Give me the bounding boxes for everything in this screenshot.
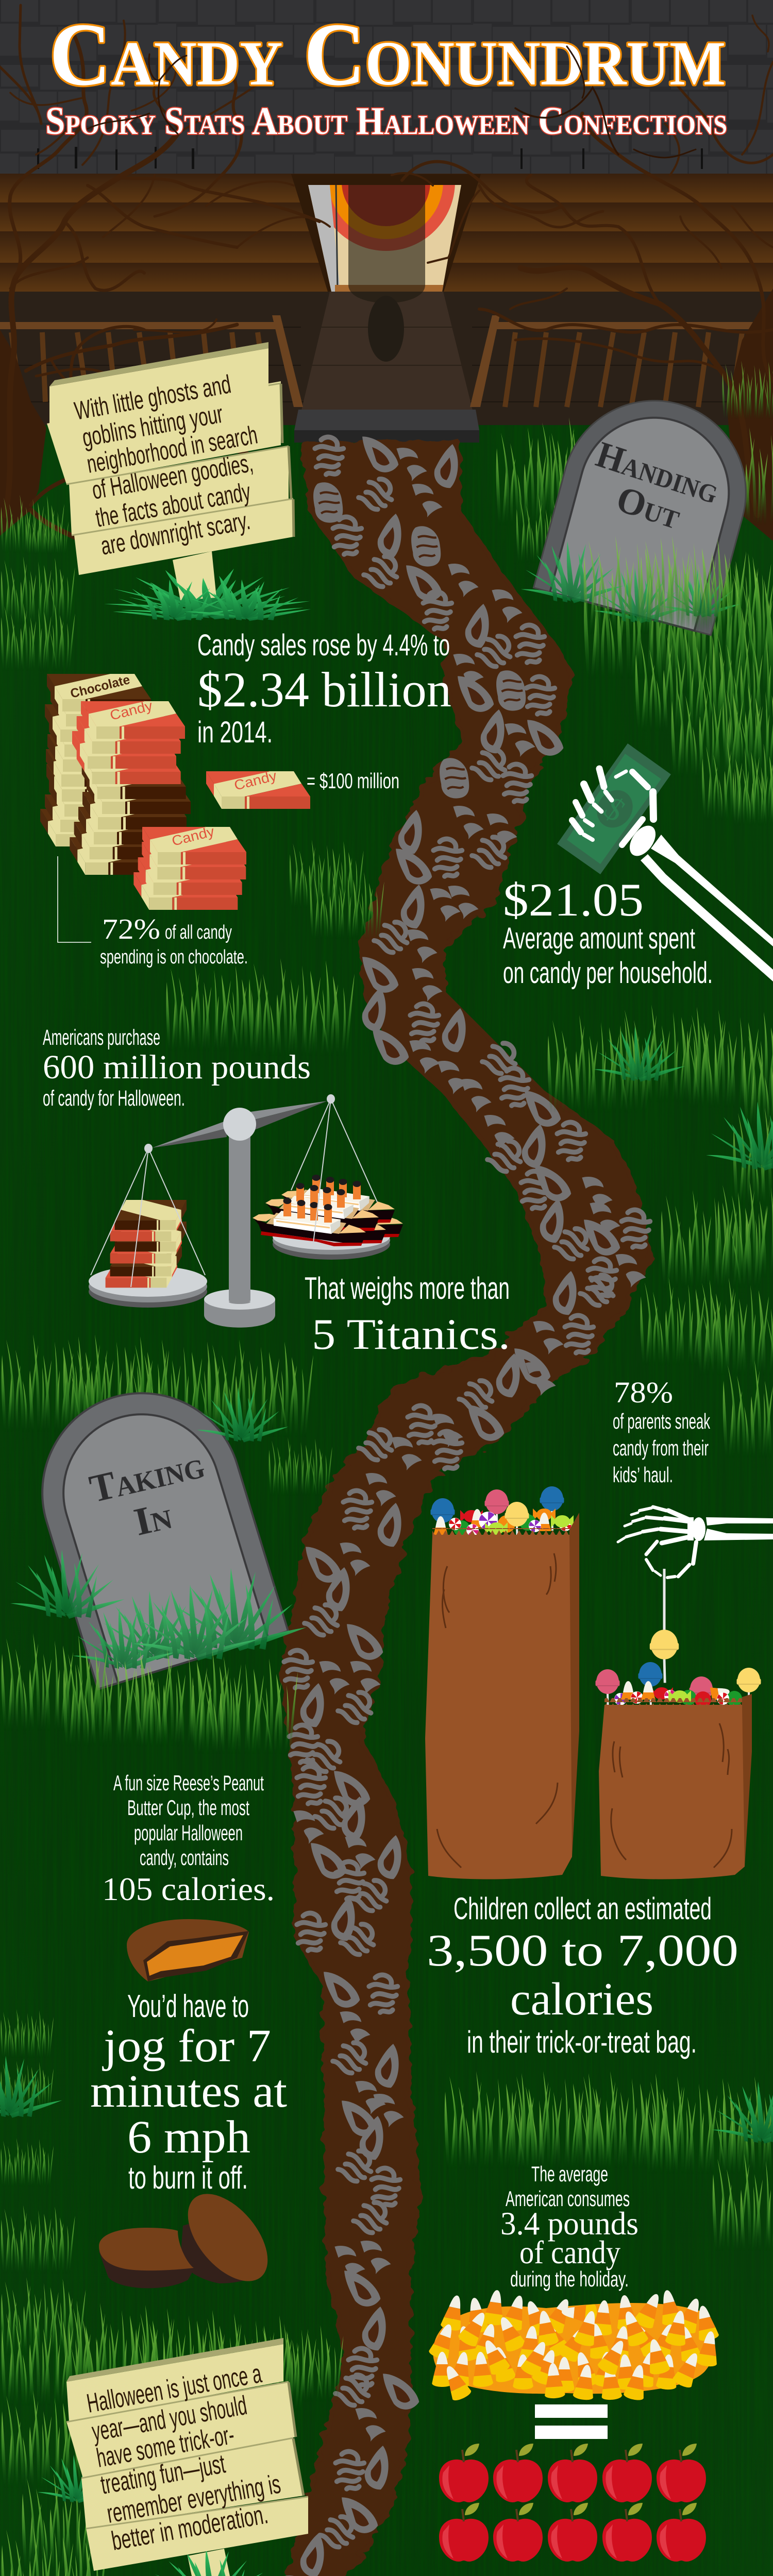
callout: 72% chocolate: of all candy [165, 922, 232, 943]
sign text: better in moderation. [109, 2499, 270, 2556]
text block: Reese's 105 calories: 105 calories. [102, 1871, 275, 1907]
text block: candy sales [197, 629, 451, 749]
front stack [133, 823, 246, 910]
porch floor [0, 292, 773, 425]
text block: $21.05 per household: $21.05 [503, 874, 644, 926]
icon: pile of candy corn [428, 2289, 721, 2402]
sign text: Halloween is just once a [85, 2359, 264, 2419]
left pan with candy [89, 1200, 207, 1308]
text block: 600 million pounds: of candy for Halloween. [43, 1086, 185, 1111]
right fence [470, 315, 773, 407]
text block: Children collect calories: calories [510, 1974, 653, 2025]
callout: 72% chocolate: 72% [102, 913, 160, 945]
icon: skeleton hand holding dollar [557, 743, 773, 981]
dirt path [266, 443, 651, 2576]
dollar bill [557, 743, 671, 874]
callout: 72% chocolate [58, 856, 248, 968]
text block: candy sales: Candy sales rose by 4.4% to [197, 629, 450, 662]
chocolate stack: Chocolate [69, 672, 131, 701]
text block: Reese's 105 calories: popular Halloween [134, 1821, 243, 1845]
text block: Reese's 105 calories: A fun size Reese’s Peanut [113, 1771, 264, 1795]
sign text: neighborhood in search [85, 420, 260, 479]
stone text: Handing Out: Out [612, 478, 685, 537]
bag contents [431, 1486, 574, 1546]
stone text: Taking In: In [130, 1494, 176, 1544]
text block: 3.4 pounds: The average [531, 2162, 608, 2186]
mixed stack [70, 698, 191, 875]
icon: short treat bag [596, 1662, 761, 1879]
sign text: are downright scary. [98, 506, 252, 561]
chart: candy bar stacks [40, 672, 246, 910]
text block: jog for 7 minutes: jog for 7 [102, 2021, 271, 2072]
text block: 78% of parents [613, 1376, 711, 1487]
sign text: treating fun—just [98, 2449, 228, 2500]
porch step [294, 410, 479, 443]
text block: 600 million pounds: 600 million pounds [43, 1048, 311, 1086]
pan strings [91, 1099, 377, 1287]
callout: 72% chocolate: spending is on chocolate. [100, 946, 248, 968]
text block: 5 Titanics: That weighs more than [305, 1271, 510, 1306]
icon: skeleton hand dropping lollipop [618, 1507, 773, 1683]
legend: one bar equals $100 million: Candy [232, 768, 278, 793]
text block: Reese's 105 calories [102, 1771, 275, 1907]
text block: jog for 7 minutes [90, 1989, 287, 2196]
text block: jog for 7 minutes: to burn it off. [128, 2160, 248, 2196]
house: roof shingles [0, 0, 773, 178]
icon: tall treat bag [425, 1486, 579, 1879]
text block: candy sales: in 2014. [197, 716, 273, 749]
stone text: Handing Out: Handing [592, 433, 724, 512]
sign text: have some trick-or- [94, 2420, 237, 2473]
left fence [0, 315, 303, 407]
front stack: Candy [170, 823, 216, 849]
icon: ten apples [439, 2444, 706, 2562]
text block: jog for 7 minutes: minutes at [90, 2066, 287, 2117]
chocolate stack [40, 672, 155, 846]
icon: equals sign [535, 2404, 608, 2439]
text block: jog for 7 minutes: 6 mph [127, 2112, 250, 2163]
sign text [85, 2359, 283, 2556]
grass patches [1, 361, 773, 1496]
text block: 78% of parents: candy from their [613, 1436, 709, 1460]
stone text: Handing Out [580, 433, 724, 546]
text block: 3.4 pounds: of candy [519, 2234, 620, 2270]
text block: 3.4 pounds [500, 2162, 638, 2291]
legend: one bar equals $100 million: = $100 million [307, 769, 399, 793]
right pan with ships [253, 1175, 403, 1260]
mixed stack: Candy [108, 698, 154, 723]
text block: 600 million pounds [43, 1025, 311, 1111]
stone text: Taking In: Taking [86, 1443, 208, 1511]
sign text: remember everything is [105, 2469, 283, 2529]
right tree [392, 15, 773, 541]
text block: Children collect calories [427, 1891, 738, 2059]
sign text [72, 369, 260, 561]
chart: balance scale candy vs titanics [89, 1094, 403, 1328]
sign text: the facts about candy [93, 477, 253, 533]
house: brown siding [0, 174, 773, 292]
sign text: of Halloween goodies, [90, 448, 255, 505]
text block: 3.4 pounds: American consumes [506, 2187, 630, 2211]
text block: 3.4 pounds: during the holiday. [510, 2267, 629, 2291]
branches crossing title [88, 46, 696, 158]
text block: 600 million pounds: Americans purchase [43, 1025, 160, 1050]
bag contents [596, 1662, 761, 1721]
text block: 3.4 pounds: 3.4 pounds [500, 2205, 638, 2242]
scale arm [144, 1094, 335, 1153]
icon: tombstone "Handing Out" [533, 380, 766, 635]
text block: $21.05 per household [503, 874, 713, 990]
path stepping stones [274, 428, 650, 2576]
text block: Reese's 105 calories: Butter Cup, the most [127, 1795, 249, 1820]
text block: 78% of parents: kids’ haul. [613, 1463, 673, 1487]
stone text: Taking In [86, 1443, 218, 1552]
text block: 5 Titanics [305, 1271, 510, 1359]
front door with glowing doorway [291, 174, 481, 362]
icon: tombstone "Taking In" [18, 1368, 288, 1689]
legend: one bar equals $100 million [206, 768, 399, 809]
dollar bill: $ [597, 789, 632, 829]
text block: 78% of parents: 78% [614, 1376, 673, 1409]
title: Candy Conundrum [49, 5, 726, 104]
icon: two peanut butter cups [99, 2179, 283, 2296]
panel: closing sign [38, 2338, 308, 2576]
text block: 5 Titanics: 5 Titanics. [312, 1310, 510, 1359]
panel: intro sign [47, 342, 311, 621]
scale base [204, 1128, 275, 1328]
sign text: goblins hitting your [80, 399, 225, 452]
sign text: With little ghosts and [72, 369, 233, 426]
text block: jog for 7 minutes: You’d have to [127, 1989, 249, 2024]
icon: bitten peanut butter cup [127, 1919, 249, 1981]
left tree [0, 5, 330, 538]
text block: Children collect calories: 3,500 to 7,000 [427, 1926, 738, 1976]
text block: Reese's 105 calories: candy, contains [140, 1845, 229, 1870]
text block: candy sales: $2.34 billion [197, 662, 451, 717]
sign text: year—and you should [90, 2391, 249, 2447]
grass over tombstones [0, 536, 773, 2576]
text block: 78% of parents: of parents sneak [613, 1409, 711, 1433]
